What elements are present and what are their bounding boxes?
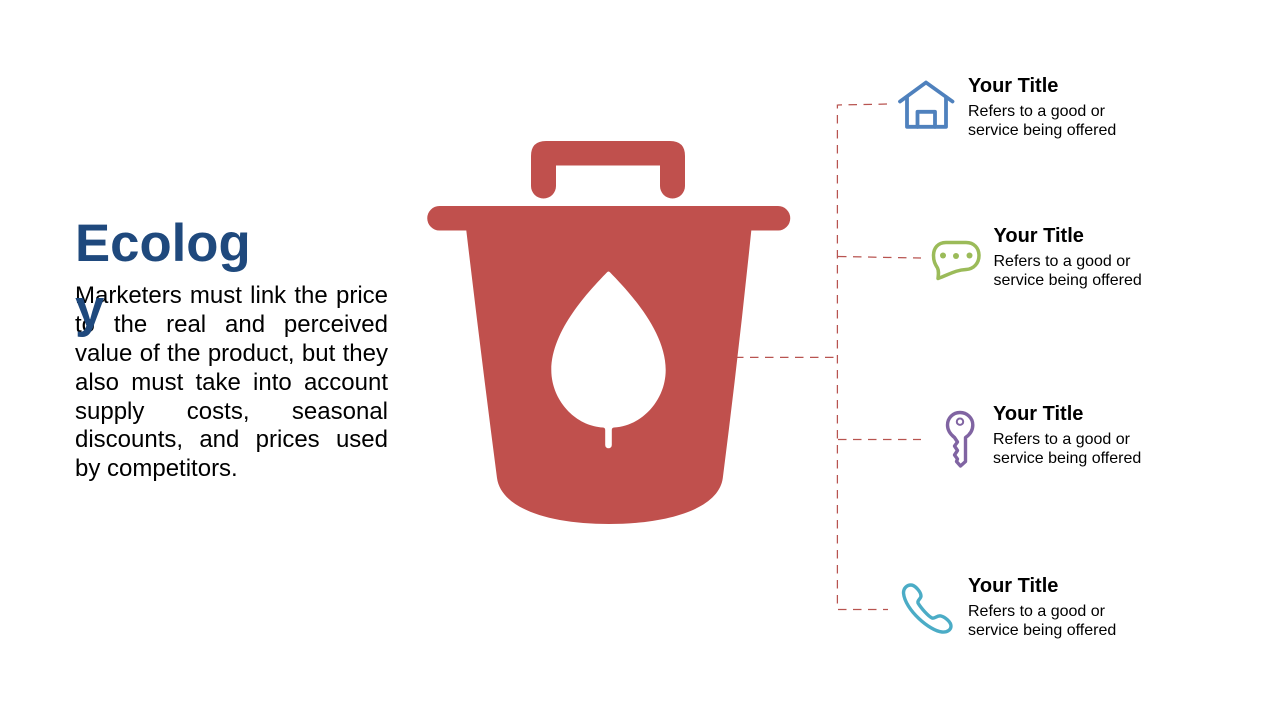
item 4 text: Refers to a good or — [968, 603, 1105, 620]
item 1 text — [968, 75, 1116, 139]
item 3 text — [993, 403, 1141, 467]
body text: discounts, and prices used — [75, 426, 388, 453]
body text — [75, 282, 388, 482]
item 2 text: Refers to a good or — [994, 253, 1130, 270]
body text: by competitors. — [75, 455, 238, 482]
item 4 text: Your Title — [968, 575, 1058, 597]
item 1 text: Your Title — [968, 75, 1058, 97]
item 3 text: Refers to a good or — [993, 431, 1130, 448]
body text: Marketers must link the price — [75, 282, 388, 309]
body text: also must take into account — [75, 369, 388, 396]
body text: to the real and perceived — [75, 311, 388, 338]
item 3 text: Your Title — [993, 403, 1083, 425]
title: Ecolog — [75, 214, 251, 273]
item 3 text: service being offered — [993, 450, 1141, 467]
item 2 text: Your Title — [994, 225, 1084, 247]
title — [75, 214, 251, 338]
body text: value of the product, but they — [75, 340, 388, 367]
title: y — [75, 279, 104, 338]
item 4 text — [968, 575, 1116, 639]
item 4 text: service being offered — [968, 622, 1116, 639]
item 2 text — [994, 225, 1142, 289]
item 1 text: Refers to a good or — [968, 103, 1105, 120]
item 1 text: service being offered — [968, 122, 1116, 139]
item 2 text: service being offered — [994, 272, 1142, 289]
body text: supply costs, seasonal — [75, 398, 388, 425]
